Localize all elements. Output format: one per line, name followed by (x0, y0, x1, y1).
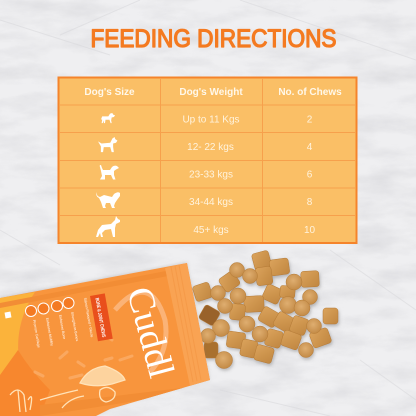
table values (182, 114, 315, 236)
table values: 6 (307, 170, 313, 180)
table header row: Dog's Size (84, 87, 135, 98)
pouch benefit text (32, 311, 79, 348)
title: FEEDING DIRECTIONS (90, 25, 336, 53)
table header row: Dog's Weight (179, 87, 243, 98)
pouch benefit text: Promote Cartilage (32, 319, 41, 348)
icon: small dog (98, 137, 117, 152)
pouch red label: BONE & JOINT CHEWS (93, 297, 106, 338)
icon: extra large dog (96, 216, 120, 237)
pouch side seal (165, 263, 210, 386)
pouch top seal (0, 271, 168, 308)
table values: 8 (307, 197, 313, 208)
bone pattern (35, 335, 132, 378)
table values: 10 (304, 225, 315, 236)
chef dog outline (10, 366, 125, 412)
pouch benefit text: Strengthens Bones (70, 311, 79, 342)
pouch yellow swoosh (0, 292, 35, 375)
pouch side text: Salmon Flavoured + Glucos (83, 297, 94, 338)
pouch benefit icons (26, 298, 74, 316)
faint ring (115, 292, 166, 372)
table header row: No. of Chews (278, 87, 342, 98)
pouch benefit text: Enhances Bone (58, 314, 66, 340)
pouch dark swoosh (0, 350, 50, 416)
table values: 4 (307, 142, 313, 153)
pouch red label (90, 293, 113, 341)
icon: extra small dog (101, 113, 115, 123)
table header row (84, 87, 342, 98)
table values: 2 (307, 114, 313, 126)
pouch logo: Cuddl (118, 283, 182, 382)
pouch bottom seal (43, 388, 184, 416)
table values: 34-44 kgs (189, 197, 233, 208)
table values: Up to 11 Kgs (182, 114, 240, 126)
pouch benefit text: Enhances Mobility (45, 317, 54, 346)
table values: 45+ kgs (193, 225, 229, 236)
icon: medium dog (100, 165, 119, 180)
scattered chews (192, 250, 338, 368)
pouch small badge (5, 312, 11, 318)
table values: 12- 22 kgs (187, 142, 234, 153)
product pouch (0, 263, 210, 416)
table values: 23-33 kgs (189, 170, 233, 180)
icon: large dog (96, 192, 120, 208)
feeding table (58, 78, 356, 243)
